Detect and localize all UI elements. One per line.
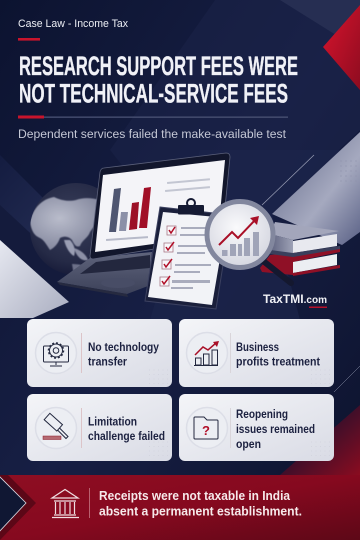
illustration: magnifying glass [207,202,291,283]
text [236,409,315,451]
icon: folder with question mark: ? [202,423,210,438]
illustration: laptop [57,153,230,297]
icon: institution building [52,490,79,518]
text: No technology [88,342,160,354]
card: reopening issues remained open [179,394,334,461]
text [236,342,320,368]
illustration: globe [30,183,98,271]
conclusion text [99,488,302,518]
bar chart on laptop screen [106,178,210,241]
card: no technology transfer [27,319,172,387]
icon: gavel [36,408,76,448]
card: limitation challenge failed [27,394,172,461]
decorative panel: light triangle left [0,240,69,318]
text [88,342,160,368]
title [19,51,298,108]
accent bar [18,38,40,41]
text: transfer [88,356,127,368]
icon: computer with gear [36,332,76,374]
text: Reopening [236,409,288,421]
text: challenge failed [88,431,165,443]
icon: rising bar chart [186,332,228,374]
chevron [0,475,36,540]
text: open [236,439,261,451]
checkboxes [160,226,176,286]
text: Limitation [88,416,137,428]
text: issues remained [236,424,315,436]
decorative panel: red diamond [323,5,360,90]
card: business profits treatment [179,319,334,387]
illustration: stacked books [260,222,340,276]
conclusion band [0,475,360,540]
conclusion text: absent a permanent establishment. [99,504,302,518]
illustration: clipboard with checklist [145,199,231,309]
text: Business [236,342,279,354]
logo: TaxTMI.com: TaxTMI.com [263,292,327,306]
text [88,416,165,443]
conclusion text: Receipts were not taxable in India [99,488,291,503]
text: profits treatment [236,356,320,368]
subtitle: Dependent services failed the make-available test [18,127,287,141]
decorative panel: grey diagonal right [272,132,360,245]
title divider [18,116,288,118]
category label: Case Law - Income Tax [18,18,129,30]
icon: folder with question mark [186,408,228,448]
